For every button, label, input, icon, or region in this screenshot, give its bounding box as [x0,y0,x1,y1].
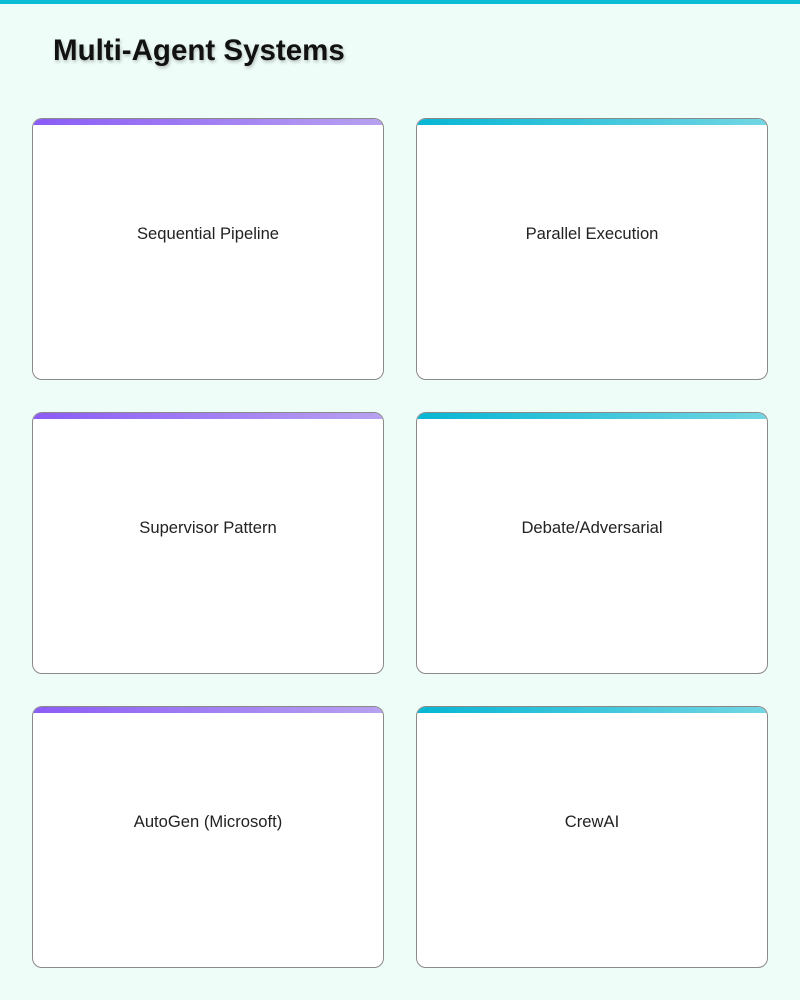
panel: supervisor pattern: Supervisor Pattern [139,518,277,537]
title: Multi-Agent Systems [53,34,345,67]
panel: debate/adversarial: Debate/Adversarial [521,518,663,537]
panel: crewai [416,706,768,968]
panel: autogen [32,706,384,968]
panel: supervisor pattern [32,412,384,674]
panel: parallel execution: Parallel Execution [526,224,658,243]
panel: sequential pipeline [32,118,384,380]
panel: crewai: CrewAI [565,812,619,831]
panel: sequential pipeline: Sequential Pipeline [137,224,279,243]
panel: parallel execution [416,118,768,380]
top accent bar [0,0,800,4]
panel: autogen: AutoGen (Microsoft) [134,812,282,831]
panel: debate/adversarial [416,412,768,674]
